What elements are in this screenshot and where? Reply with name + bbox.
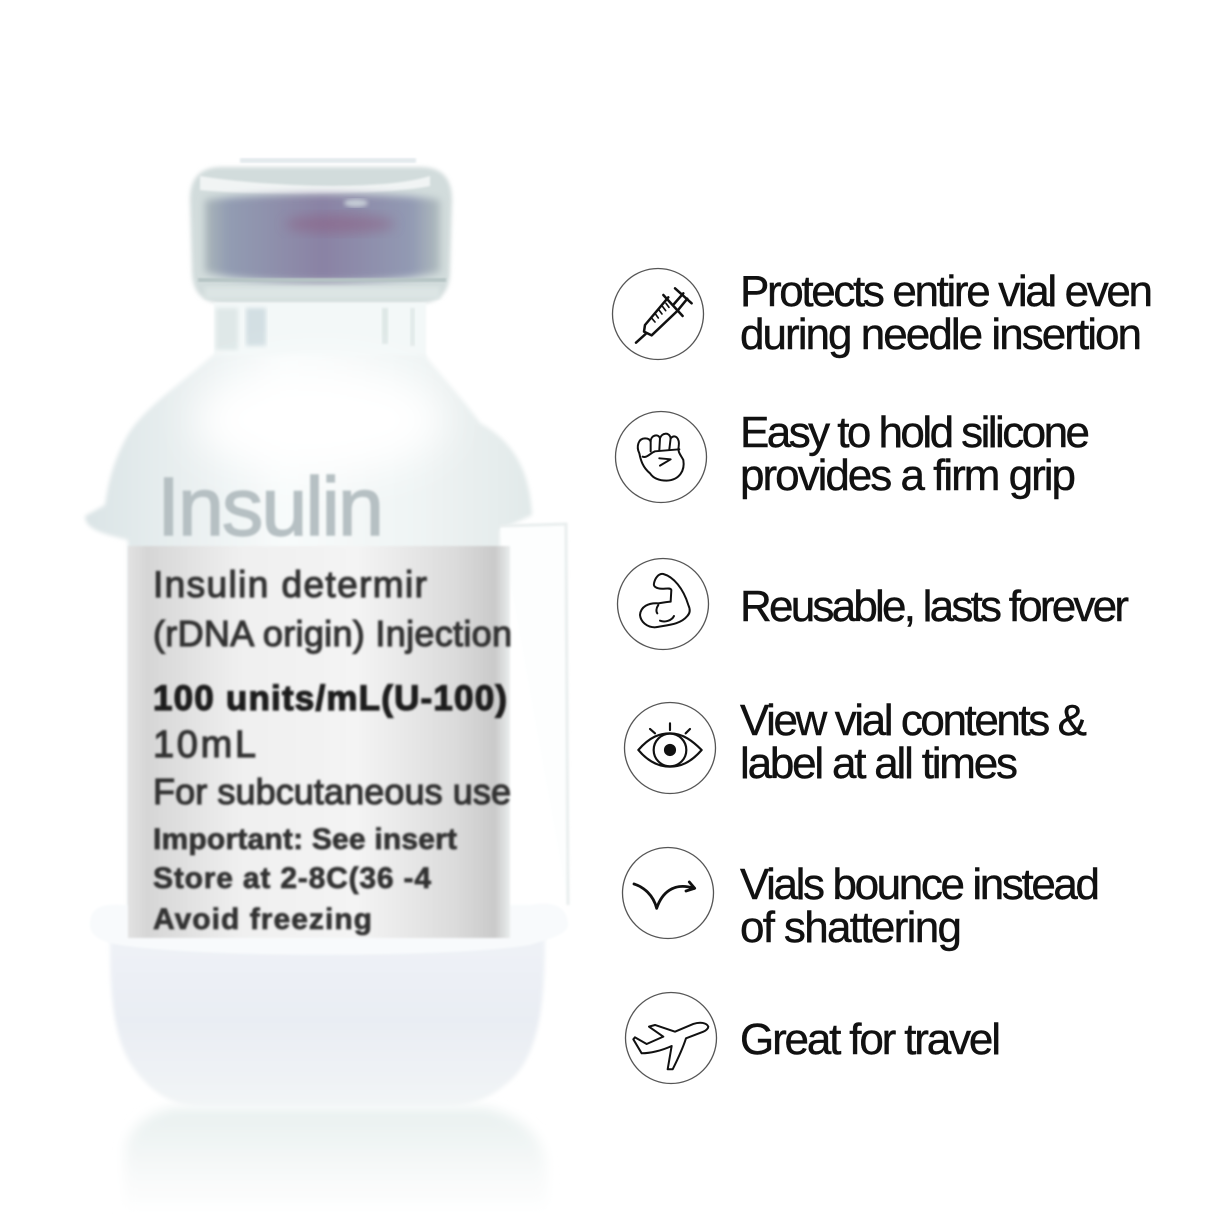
feature text: provides a firm grip xyxy=(740,451,1076,500)
feature text: during needle insertion xyxy=(740,310,1142,359)
vial cap xyxy=(190,158,452,303)
feature text: Protects entire vial even xyxy=(740,267,1153,316)
feature: view contents xyxy=(624,696,1087,794)
vial reflection xyxy=(125,1108,548,1214)
label text: (rDNA origin) Injection xyxy=(153,613,512,654)
feature: bounce xyxy=(622,848,1100,952)
feature text: of shattering xyxy=(740,903,962,952)
label text: 10mL xyxy=(153,724,256,766)
label text: Insulin determir xyxy=(153,564,427,605)
vial neck xyxy=(214,303,426,359)
icon: bounce arrow xyxy=(622,848,714,938)
feature text: View vial contents & xyxy=(740,696,1087,745)
label text: Store at 2-8C(36 -4 xyxy=(153,862,431,895)
feature text: Great for travel xyxy=(740,1015,1001,1064)
highlight xyxy=(195,365,445,475)
feature text: Vials bounce instead xyxy=(740,860,1100,909)
feature: reusable xyxy=(618,558,1129,650)
icon: flexed arm xyxy=(618,558,708,650)
feature text: Easy to hold silicone xyxy=(740,408,1090,457)
bottom silicone cup xyxy=(90,904,568,1106)
insulin vial illustration xyxy=(85,158,568,1214)
feature: firm grip xyxy=(616,408,1090,502)
label text: For subcutaneous use xyxy=(153,771,511,812)
Insulin brand word: Insulin xyxy=(157,460,384,553)
icon: syringe xyxy=(612,268,704,360)
feature: travel xyxy=(626,992,1001,1084)
label text: Important: See insert xyxy=(153,823,457,856)
feature text: label at all times xyxy=(740,739,1018,788)
feature text: Reusable, lasts forever xyxy=(740,582,1129,631)
icon: fist xyxy=(616,412,706,502)
label text: Avoid freezing xyxy=(153,903,372,936)
label text: 100 units/mL(U-100) xyxy=(153,679,507,718)
right silicone strap xyxy=(500,524,568,905)
label text xyxy=(153,564,512,936)
vial shoulder body xyxy=(85,355,532,940)
vial label xyxy=(128,546,512,938)
icon: eye xyxy=(624,702,716,794)
icon: airplane xyxy=(626,992,716,1084)
feature: needle insertion xyxy=(612,267,1153,360)
